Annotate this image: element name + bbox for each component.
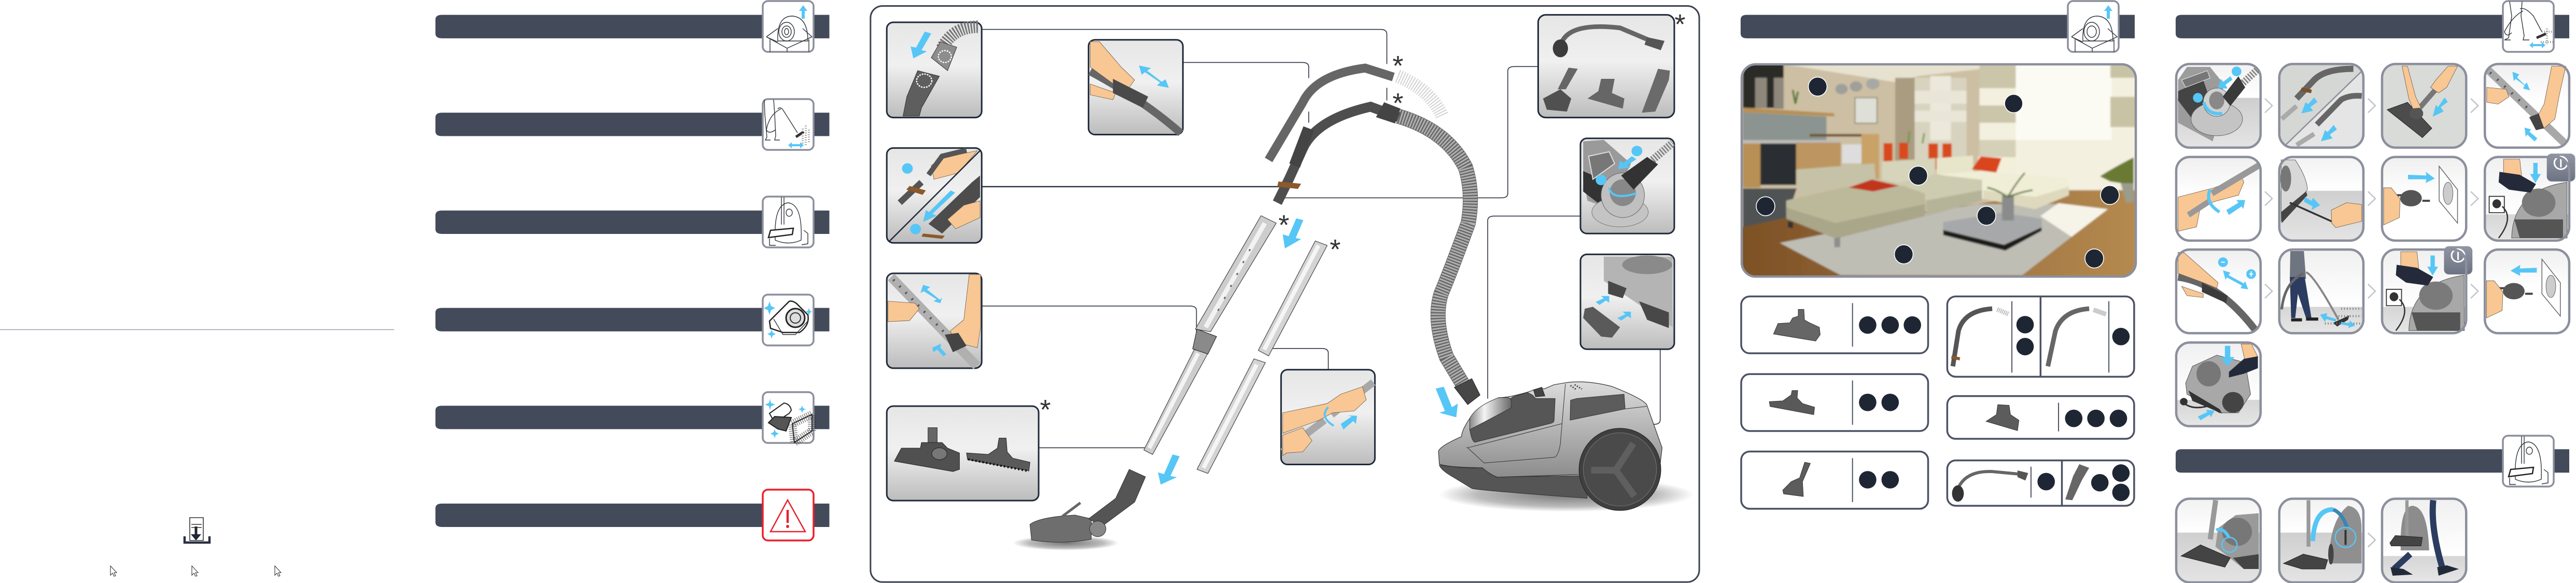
section 2 header bar xyxy=(1741,15,2135,38)
step: fit nozzle xyxy=(2382,64,2466,148)
step: carrying xyxy=(2382,498,2466,582)
extension tubes xyxy=(1197,241,1327,474)
box: flexible and crevice xyxy=(1947,461,2134,506)
asterisk markers: * xyxy=(1278,210,1290,241)
icon: warning xyxy=(763,490,814,540)
icon: vacuuming xyxy=(763,99,814,150)
accessory usage boxes xyxy=(1741,296,2134,509)
divider rule xyxy=(0,329,394,330)
header bar xyxy=(2176,15,2569,38)
step: adjust telescopic xyxy=(2485,64,2569,148)
arrow xyxy=(1283,218,1304,248)
assembly diagram panel xyxy=(871,6,1699,582)
icon: filter cleaning xyxy=(763,392,814,443)
step: switch off xyxy=(2382,246,2472,333)
icon: unpacking xyxy=(763,1,814,52)
icon: emptying container xyxy=(763,295,814,345)
handle, lower xyxy=(1277,102,1401,203)
section 3: use instructions xyxy=(2176,15,2575,582)
asterisk markers xyxy=(1040,9,1686,425)
icon: storage upright xyxy=(763,197,814,247)
icon: unpacking small xyxy=(2068,1,2119,52)
panel: telescopic adjust xyxy=(887,273,982,368)
asterisk markers: * xyxy=(1674,9,1686,40)
asterisk markers: * xyxy=(1329,234,1341,265)
step: vacuuming xyxy=(2279,249,2363,333)
step: rewind cord xyxy=(2176,342,2261,426)
step: store upright xyxy=(2279,498,2363,582)
panel: suction slider xyxy=(1088,40,1183,135)
step: plug in xyxy=(2382,157,2466,241)
leader lines xyxy=(982,30,1660,448)
step: tube rotate xyxy=(2176,157,2261,241)
panel: accessories xyxy=(1538,15,1674,118)
floor nozzle xyxy=(1013,469,1145,550)
handle, upper xyxy=(1269,68,1393,160)
icon: vacuuming small xyxy=(2503,1,2554,52)
telescopic tube xyxy=(1144,216,1276,454)
icon: storage small xyxy=(2503,436,2554,487)
arrow xyxy=(1158,454,1180,484)
box: turbo brush xyxy=(1741,451,1928,509)
arrow xyxy=(1436,387,1458,417)
panel: cord storage xyxy=(1580,254,1674,349)
header bar xyxy=(2176,449,2569,473)
panel: tube extension xyxy=(1281,370,1375,465)
asterisk markers: * xyxy=(1392,88,1404,119)
vacuum cleaner main body xyxy=(1438,379,1694,512)
step chevrons xyxy=(2265,99,2478,547)
box: upholstery nozzle xyxy=(1947,396,2134,439)
step: switch on xyxy=(2485,154,2575,241)
hose xyxy=(1398,116,1471,395)
box: carpet nozzle xyxy=(1741,296,1928,353)
box: handles xyxy=(1947,296,2134,377)
panel: hose connection xyxy=(1580,138,1674,233)
step: unplug xyxy=(2485,249,2569,333)
step: pull cord xyxy=(2279,157,2363,241)
step: fit tube xyxy=(2279,64,2363,148)
asterisk markers: * xyxy=(1392,50,1404,81)
icon: cursors xyxy=(110,566,281,576)
ghost hose xyxy=(1398,76,1442,116)
step: park nozzle xyxy=(2176,498,2261,582)
box: parquet nozzle xyxy=(1741,374,1928,431)
panel: cuff xyxy=(887,22,982,118)
icon: download xyxy=(185,518,209,543)
panel: floor nozzles xyxy=(887,406,1039,501)
room photo xyxy=(1742,64,2136,277)
step: suction control xyxy=(2176,249,2261,333)
step: connect hose xyxy=(2176,64,2261,148)
asterisk markers: * xyxy=(1040,394,1051,425)
left column: section headers xyxy=(436,15,829,527)
panel: brush handle xyxy=(887,148,982,243)
